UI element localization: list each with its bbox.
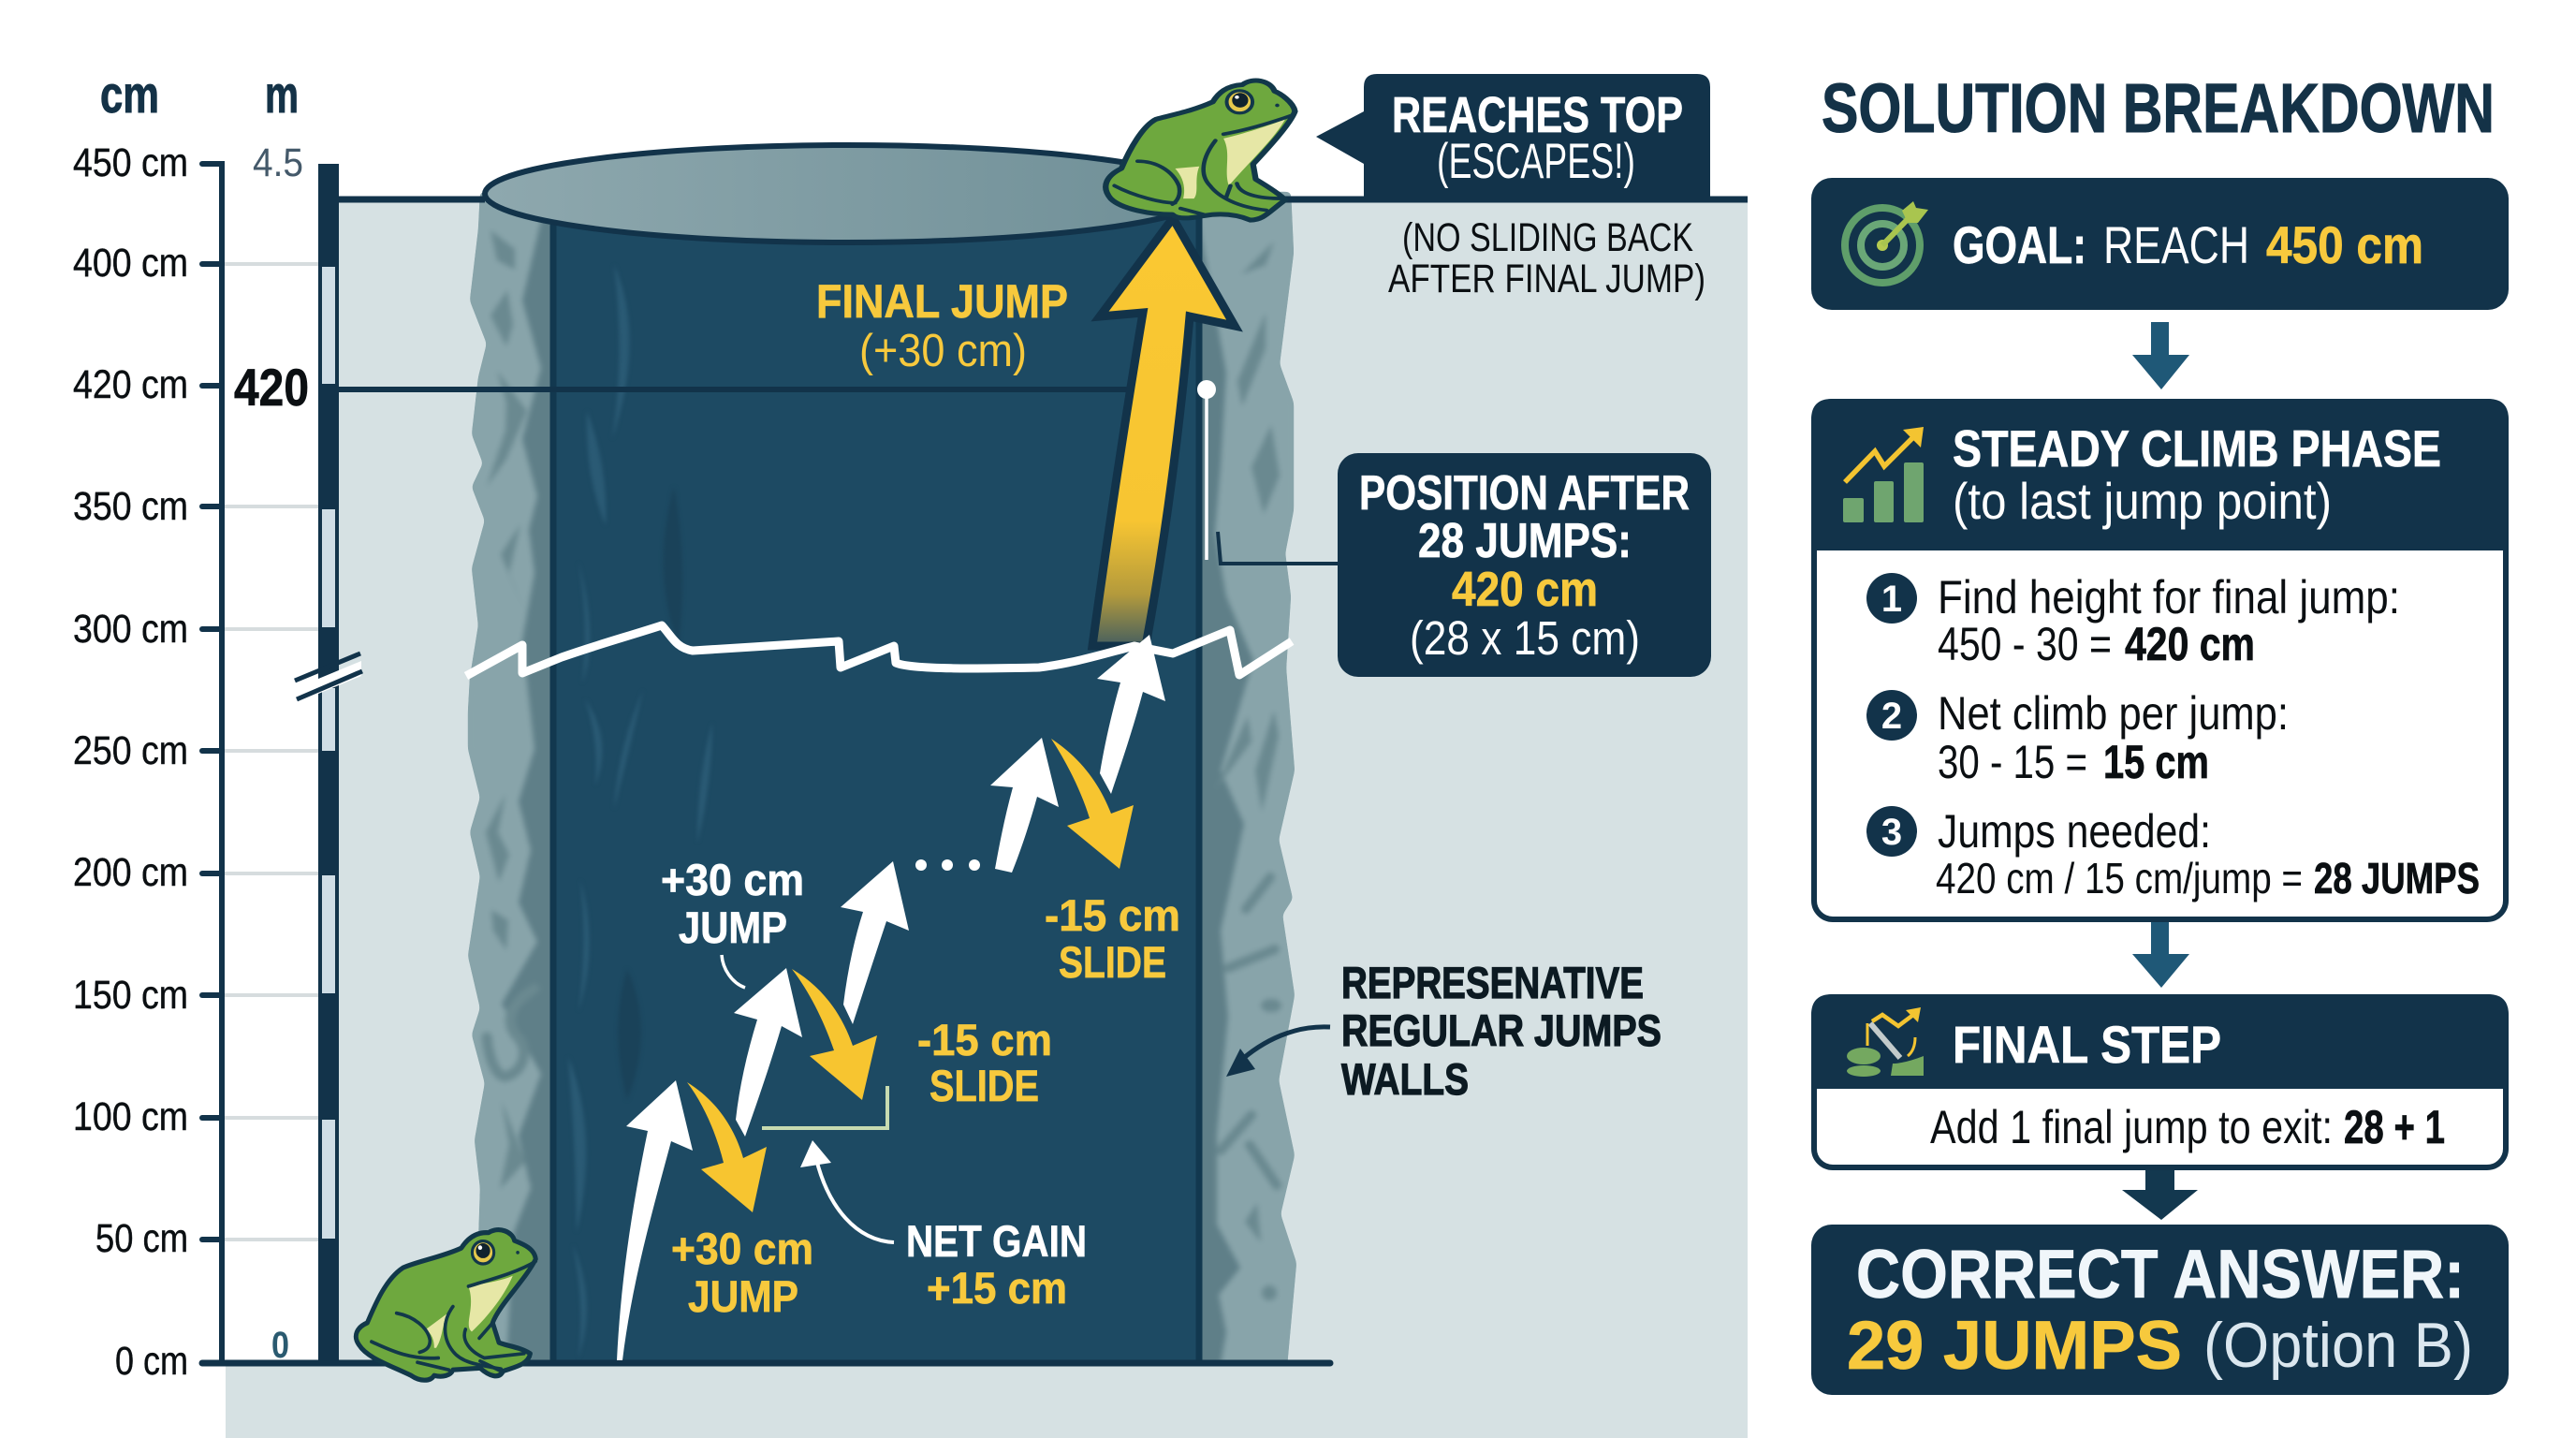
- cm axis with ticks: [202, 164, 222, 1363]
- scale column headings: [100, 65, 299, 124]
- metre labels: 0: [271, 1325, 289, 1366]
- arrow: net gain pointer: [800, 1140, 894, 1242]
- icon: frog at top: [1105, 81, 1295, 220]
- label: walls: [1341, 958, 1661, 1104]
- note: no sliding back: [1388, 215, 1705, 301]
- cm axis labels: [73, 140, 188, 1384]
- panel: final step: 28 + 1: [2344, 1101, 2445, 1153]
- connector: 420 marker to position callout: [1197, 380, 1338, 564]
- net gain bracket: [762, 1086, 887, 1128]
- callout: position after 28 jumps: 420 cm: [1452, 563, 1598, 617]
- panel: well scene background: [226, 199, 1748, 1438]
- well interior: [550, 194, 1200, 1363]
- callout: position after 28 jumps: POSITION AFTER: [1359, 466, 1690, 521]
- panel: correct answer: (Option B): [2203, 1310, 2473, 1381]
- icon: rising chart: [1843, 427, 1924, 522]
- label: net gain: NET GAIN: [906, 1216, 1087, 1266]
- panel: steady climb phase: (to last jump point): [1953, 472, 2332, 530]
- torn break line: [466, 625, 1292, 676]
- step 2: Net climb per jump:: [1938, 687, 2289, 740]
- label: -15 cm slide, upper: [1045, 890, 1180, 987]
- metre labels: [253, 140, 303, 1366]
- cm axis labels: 0 cm: [115, 1339, 188, 1384]
- cm axis labels: 50 cm: [95, 1216, 188, 1261]
- step 1: Find height for final jump:: [1938, 571, 2400, 624]
- scale column headings: cm: [100, 65, 159, 124]
- panel: goal: 450 cm: [2266, 215, 2423, 274]
- cm axis labels: 350 cm: [73, 484, 188, 529]
- well rim ellipse: [485, 145, 1209, 242]
- label: -15 cm slide, upper: -15 cm: [1045, 890, 1180, 940]
- left wall: [468, 193, 550, 1359]
- panel: goal: GOAL:: [1953, 215, 2086, 274]
- step 3: Jumps needed:: [1938, 805, 2211, 858]
- label: walls: REGULAR JUMPS: [1341, 1005, 1661, 1055]
- panel: correct answer: 29 JUMPS: [1847, 1308, 2182, 1384]
- callout: position after 28 jumps: (28 x 15 cm): [1410, 611, 1640, 665]
- chart: height scale: [73, 65, 362, 1384]
- small jump pointer: [722, 955, 745, 988]
- cm axis labels: 200 cm: [73, 850, 188, 895]
- arrow: final step to answer: [2122, 1170, 2198, 1220]
- label: +30 cm jump, white: +30 cm: [661, 855, 804, 904]
- panel: final step: [1811, 994, 2509, 1167]
- label: final jump: (+30 cm): [859, 326, 1027, 376]
- label: +30 cm jump, yellow: +30 cm: [671, 1224, 813, 1273]
- highlighted 420 label: 420: [234, 358, 309, 417]
- label: final jump: FINAL JUMP: [816, 275, 1068, 328]
- cm axis labels: 450 cm: [73, 140, 188, 185]
- panel: goal: REACH: [2103, 215, 2249, 274]
- step 3: 28 JUMPS: [2314, 854, 2480, 902]
- note: no sliding back: AFTER FINAL JUMP): [1388, 257, 1705, 301]
- label: final jump: [816, 275, 1068, 376]
- step 2: 30 - 15 =: [1938, 736, 2087, 788]
- label: -15 cm slide, upper: SLIDE: [1059, 937, 1166, 987]
- label: +30 cm jump, white: JUMP: [679, 902, 787, 952]
- panel: goal: [1811, 178, 2509, 310]
- cm axis labels: 420 cm: [73, 362, 188, 407]
- step 1: [1866, 571, 2400, 670]
- yellow slide arrows: [687, 739, 1134, 1212]
- label: -15 cm slide, lower: SLIDE: [929, 1061, 1039, 1110]
- arrow: walls pointer: [1226, 1027, 1330, 1077]
- callout: reaches top: REACHES TOP: [1392, 87, 1683, 143]
- ground and top lines: [202, 199, 1748, 1363]
- cm axis labels: 400 cm: [73, 241, 188, 286]
- icon: frog at bottom: [356, 1230, 535, 1380]
- icon: target: [1845, 201, 1928, 283]
- label: net gain: +15 cm: [927, 1263, 1067, 1313]
- step 3: [1866, 805, 2480, 902]
- step 1: 420 cm: [2125, 618, 2255, 670]
- cm axis labels: 250 cm: [73, 728, 188, 773]
- scale gridlines: [225, 264, 318, 1240]
- panel: final step: FINAL STEP: [1953, 1015, 2221, 1074]
- step 2: 2: [1881, 696, 1902, 737]
- cm axis labels: 300 cm: [73, 607, 188, 652]
- label: +30 cm jump, white: [661, 855, 804, 952]
- panel: steady climb phase: STEADY CLIMB PHASE: [1953, 419, 2441, 477]
- step 1: 450 - 30 =: [1938, 618, 2112, 670]
- callout: position after 28 jumps: 28 JUMPS:: [1418, 514, 1632, 568]
- panel: steady climb phase: [1811, 399, 2509, 919]
- label: +30 cm jump, yellow: [671, 1224, 813, 1321]
- step 3: 3: [1881, 812, 1902, 853]
- step 1: 1: [1881, 579, 1902, 620]
- white jump arrows: [617, 635, 1165, 1360]
- arrow: final jump: [1092, 218, 1235, 646]
- cm axis labels: 150 cm: [73, 973, 188, 1018]
- arrow: climb to final step: [2132, 922, 2189, 988]
- cm axis labels: 100 cm: [73, 1094, 188, 1139]
- label: net gain: [906, 1216, 1087, 1313]
- panel: final step: Add 1 final jump to exit:: [1930, 1101, 2333, 1153]
- panel: correct answer: [1811, 1225, 2509, 1395]
- label: +30 cm jump, yellow: JUMP: [688, 1271, 798, 1321]
- panel: correct answer: CORRECT ANSWER:: [1856, 1237, 2465, 1313]
- scale column headings: m: [265, 65, 299, 124]
- callout: reaches top: [1316, 74, 1710, 197]
- arrow: goal to climb: [2132, 322, 2189, 389]
- striped metre ruler: [318, 164, 339, 1363]
- label: -15 cm slide, lower: -15 cm: [917, 1015, 1052, 1064]
- step 3: 420 cm / 15 cm/jump =: [1936, 854, 2303, 902]
- note: no sliding back: (NO SLIDING BACK: [1402, 215, 1693, 260]
- step 2: [1866, 687, 2289, 788]
- right wall: [1193, 192, 1296, 1376]
- dotted continuation: [915, 859, 980, 871]
- callout: position after 28 jumps: [1338, 453, 1711, 677]
- 420 cm height line: [338, 387, 1133, 392]
- icon: climbing over rocks: [1847, 1007, 1924, 1077]
- label: walls: REPRESENATIVE: [1341, 958, 1644, 1007]
- callout: reaches top: (ESCAPES!): [1437, 134, 1635, 189]
- axis break mark: [295, 653, 362, 703]
- label: walls: WALLS: [1341, 1054, 1469, 1104]
- metre labels: 4.5: [253, 140, 303, 185]
- step 2: 15 cm: [2103, 736, 2209, 788]
- label: -15 cm slide, lower: [917, 1015, 1052, 1110]
